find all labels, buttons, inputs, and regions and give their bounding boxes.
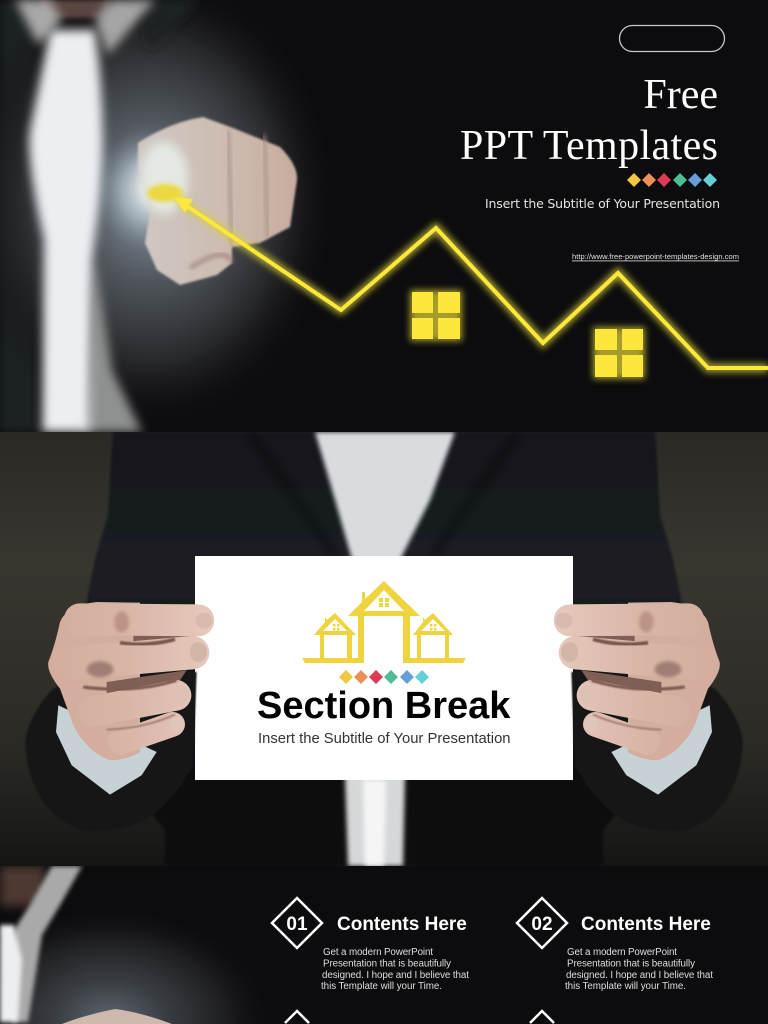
- subtitle: Insert the Subtitle of Your Presentation: [485, 196, 720, 211]
- logo placeholder pill: [620, 26, 724, 52]
- title: PPT Templates: [460, 123, 718, 169]
- panel: section break: [0, 432, 768, 866]
- item description: this Template will your Time.: [321, 981, 442, 992]
- photo: businessman suit and shirt: [0, 0, 340, 432]
- item heading: Contents Here: [337, 914, 467, 935]
- item description: [321, 947, 469, 992]
- panel: title slide: [0, 0, 768, 432]
- item 02: [517, 898, 713, 992]
- icon: diamond 04 cropped: [530, 1011, 554, 1023]
- photo: pointing fist: [95, 117, 297, 285]
- item 01: [272, 898, 469, 992]
- section subtitle: Insert the Subtitle of Your Presentation: [258, 731, 511, 747]
- item description: Presentation that is beautifully: [323, 958, 451, 970]
- colour diamonds: [339, 670, 429, 684]
- photo: suit and shirt: [78, 432, 690, 866]
- icon: diamond number 01: 01: [286, 914, 308, 935]
- icon: window house 1: [410, 290, 462, 341]
- icon: diamond number 02: [517, 898, 567, 948]
- item description: designed. I hope and I believe that: [322, 970, 469, 981]
- item description: this Template will your Time.: [565, 981, 686, 992]
- icon: diamond number 02: 02: [531, 914, 553, 935]
- icon: yellow houses logo: [302, 581, 466, 663]
- white card: [195, 556, 573, 780]
- item description: Presentation that is beautifully: [567, 958, 695, 970]
- icon: window house 2: [593, 327, 645, 379]
- photo: left hand: [25, 602, 213, 831]
- title: [460, 72, 718, 169]
- website link: http://www.free-powerpoint-templates-design.com: [572, 252, 739, 261]
- item description: Get a modern PowerPoint: [323, 947, 433, 958]
- icon: diamond number 01: [272, 898, 322, 948]
- colour diamonds: [627, 173, 717, 187]
- panel: contents: [0, 866, 768, 1024]
- section heading: Section Break: [257, 685, 511, 727]
- icon: arrow head: [174, 197, 193, 213]
- icon: diamond 03 cropped: [285, 1011, 309, 1023]
- photo: blurred suit and hand: [0, 866, 242, 1024]
- item description: designed. I hope and I believe that: [566, 970, 713, 981]
- glowing yellow roof line: [174, 197, 768, 368]
- item description: Get a modern PowerPoint: [567, 947, 677, 958]
- item heading: Contents Here: [581, 914, 711, 935]
- item description: [565, 947, 713, 992]
- photo: right hand: [555, 602, 743, 831]
- title: Free: [643, 72, 718, 118]
